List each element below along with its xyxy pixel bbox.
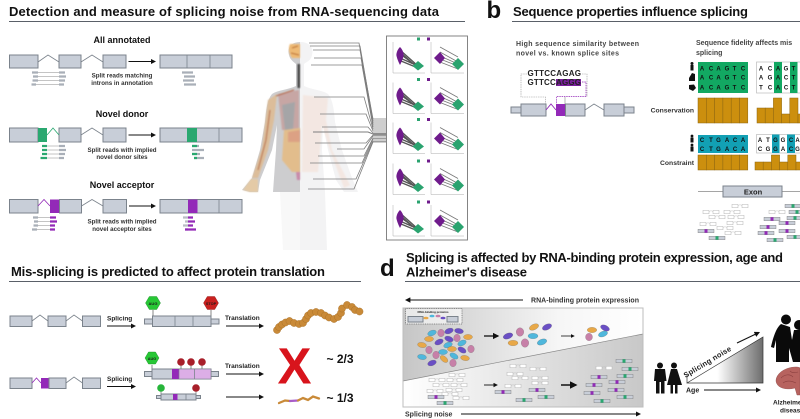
chart: splicing noise wedge bbox=[687, 337, 763, 383]
arrow: bottom two bbox=[561, 384, 576, 386]
isoforms: high splicing noise bbox=[584, 359, 638, 403]
icon: human body anatomy bbox=[242, 42, 358, 250]
diagram: all annotated gene bbox=[10, 55, 232, 84]
diagram: short mRNA bbox=[156, 384, 200, 400]
alignment: variable green: C bbox=[784, 86, 789, 92]
diagram: normal mRNA with AUG and STOP: AUG bbox=[149, 301, 157, 306]
label: splicing noise rotated: Splicing noise bbox=[682, 344, 733, 380]
alignment: variable green: G bbox=[768, 76, 773, 82]
arrow: bottom one bbox=[484, 384, 497, 386]
isoforms: medium splicing noise bbox=[495, 364, 554, 402]
alignment: variable blue: G bbox=[766, 147, 771, 153]
arrow: splicing mis-spliced: Splicing bbox=[107, 376, 132, 383]
alignment: variable green: C bbox=[784, 76, 789, 82]
arrow: splicing mis-spliced bbox=[107, 376, 135, 386]
text: high sequence similarity: High sequence similarity between bbox=[516, 41, 639, 48]
alignment: variable blue: C bbox=[758, 147, 763, 153]
cluster: proteins high bbox=[417, 327, 474, 367]
title: mis-splicing: Mis-splicing is predicted to affect protein translation bbox=[11, 264, 325, 279]
arrow: age bbox=[704, 389, 760, 391]
panel: RBP expression, age and Alzheimer's bbox=[380, 250, 800, 418]
alignment: constrained blue: G bbox=[716, 138, 721, 144]
label: RBP expression: RNA-binding protein expression bbox=[531, 298, 639, 304]
alignment: variable blue: C bbox=[789, 138, 794, 144]
alignment: variable blue bbox=[756, 134, 800, 153]
label: constraint: Constraint bbox=[660, 160, 695, 167]
arrow: translation to decay: Translation bbox=[225, 363, 260, 370]
alignment: conserved green: G bbox=[725, 66, 730, 72]
caption: all annotated: Split reads matching bbox=[92, 72, 153, 80]
alignment: constrained blue: G bbox=[716, 147, 721, 153]
panel: noise gradient box bbox=[403, 308, 643, 407]
alignment: constrained blue: A bbox=[725, 147, 730, 153]
title: splicing affected line two: Alzheimer's disease bbox=[406, 264, 527, 280]
alignment: constrained blue: T bbox=[709, 138, 713, 144]
alignment: variable green: A bbox=[776, 86, 781, 92]
diagram: splice site similarity: GTTCCAGAG bbox=[528, 69, 581, 78]
label: conservation: Conservation bbox=[651, 108, 694, 114]
alignment: variable blue: G bbox=[773, 138, 778, 144]
arrow: RBP expression bbox=[406, 299, 523, 301]
title: sequence properties: Sequence properties influence splicing bbox=[513, 4, 748, 19]
heading: novel donor: Novel donor bbox=[96, 109, 149, 119]
value: two thirds: ~ 2/3 bbox=[326, 352, 354, 366]
diagram: normal mRNA with AUG and STOP: STOP bbox=[206, 302, 217, 306]
arrow: short translation bbox=[226, 396, 263, 398]
arrow: top one bbox=[484, 335, 498, 337]
alignment: variable green: T bbox=[792, 66, 796, 72]
alignment: variable green: A bbox=[759, 66, 764, 72]
alignment: conserved green: G bbox=[725, 76, 730, 82]
text: novel vs known: novel vs. known splice sites bbox=[516, 50, 619, 58]
alignment: variable green: T bbox=[759, 86, 763, 92]
icon: truncated protein bbox=[279, 396, 319, 403]
label: splicing noise: Splicing noise bbox=[405, 412, 453, 418]
alignment: variable blue: A bbox=[795, 138, 800, 144]
label: age: Age bbox=[686, 388, 699, 394]
alignment: variable blue: C bbox=[789, 147, 794, 153]
diagram: mRNA with premature stops bbox=[144, 352, 218, 379]
diagram: novel donor gene bbox=[10, 128, 242, 158]
diagram: normal pre-mRNA bbox=[10, 315, 100, 326]
cluster: proteins low bbox=[586, 324, 610, 341]
panel: sequence properties bbox=[486, 0, 800, 242]
heading: all annotated: All annotated bbox=[93, 35, 151, 45]
arrow: translation to decay bbox=[225, 363, 263, 374]
alignment: variable green: C bbox=[768, 66, 773, 72]
alignment: conserved green: A bbox=[716, 86, 721, 92]
diagram: splice site similarity: GTTCCAGGG bbox=[528, 78, 581, 87]
isoforms: low noise exon bbox=[698, 204, 748, 240]
text: sequence fidelity: Sequence fidelity affects mis bbox=[696, 40, 792, 47]
diagram: exon: Exon bbox=[744, 188, 763, 197]
diagram: mRNA with premature stops: AUG bbox=[148, 357, 156, 361]
alignment: constrained blue: C bbox=[733, 147, 738, 153]
icon: red X: X bbox=[278, 338, 312, 394]
alignment: conserved green: A bbox=[700, 66, 705, 72]
alignment: variable green bbox=[756, 62, 800, 93]
diagram: normal mRNA with AUG and STOP bbox=[144, 296, 219, 326]
alignment: conserved green: A bbox=[716, 66, 721, 72]
alignment: constrained blue bbox=[698, 135, 748, 153]
lines: tissue connector bundle bbox=[308, 43, 386, 189]
alignment: constrained blue: T bbox=[709, 147, 713, 153]
alignment: variable blue: A bbox=[758, 138, 763, 144]
alignment: conserved green: A bbox=[700, 76, 705, 82]
alignment: constrained blue: A bbox=[741, 147, 746, 153]
arrow: top two bbox=[561, 335, 574, 337]
panel: tissue violin plots bbox=[386, 36, 468, 240]
panel: detection of splicing noise bbox=[9, 4, 468, 250]
arrow: splicing normal bbox=[107, 316, 135, 326]
arrow: translation normal: Translation bbox=[225, 315, 260, 322]
arrow: splicing noise bbox=[461, 413, 640, 415]
title: detection heading: Detection and measure of splicing noise from RNA-sequencing data bbox=[9, 4, 440, 19]
alignment: conserved green: A bbox=[716, 76, 721, 82]
alignment: constrained blue: A bbox=[725, 138, 730, 144]
alignment: conserved green: C bbox=[709, 86, 714, 92]
alignment: conserved green: G bbox=[725, 86, 730, 92]
icons: species silhouettes bbox=[689, 62, 696, 152]
alignment: conserved green: C bbox=[741, 86, 746, 92]
panel letter d: d bbox=[380, 255, 395, 282]
diagram: mis-spliced pre-mRNA bbox=[10, 377, 100, 388]
alignment: conserved green: T bbox=[733, 66, 737, 72]
alignment: variable blue: G bbox=[773, 147, 778, 153]
panel: protein translation bbox=[9, 264, 363, 405]
alignment: variable green: C bbox=[768, 86, 773, 92]
alignment: conserved green: A bbox=[700, 86, 705, 92]
arrow: splicing normal: Splicing bbox=[107, 316, 132, 322]
inset: RNA-binding proteins bbox=[406, 308, 462, 324]
isoforms: high noise exon bbox=[758, 204, 800, 242]
arrow: translation normal bbox=[225, 315, 263, 326]
alignment: conserved green: T bbox=[733, 86, 737, 92]
alignment: variable blue: A bbox=[781, 147, 786, 153]
bar chart: conservation bbox=[698, 98, 800, 123]
alignment: conserved green: C bbox=[709, 76, 714, 82]
alignment: constrained blue: C bbox=[700, 138, 705, 144]
alignment: conserved green: C bbox=[741, 66, 746, 72]
icon: young couple bbox=[654, 362, 682, 394]
bar chart: constraint bbox=[698, 155, 800, 170]
cluster: proteins medium bbox=[502, 322, 553, 347]
text: splicing: splicing bbox=[696, 50, 722, 57]
icon: elderly couple bbox=[771, 314, 800, 362]
caption: novel donor: Split reads with implied bbox=[87, 147, 157, 154]
alignment: variable blue: G bbox=[781, 138, 786, 144]
title: splicing affected line one: Splicing is affected by RNA-binding protein expression, age and bbox=[406, 250, 783, 265]
alignment: variable green: A bbox=[759, 76, 764, 82]
alignment: constrained blue: C bbox=[733, 138, 738, 144]
alignment: conserved green: C bbox=[709, 66, 714, 72]
alignment: variable green: A bbox=[776, 76, 781, 82]
alignment: constrained blue: C bbox=[700, 147, 705, 153]
diagram: splice site similarity bbox=[511, 69, 634, 116]
icon: full-length protein chain bbox=[273, 301, 363, 334]
alignment: variable green: G bbox=[784, 66, 789, 72]
alignment: conserved green bbox=[698, 62, 748, 93]
heading: novel acceptor: Novel acceptor bbox=[90, 180, 155, 190]
value: one third: ~ 1/3 bbox=[326, 391, 354, 405]
alignment: variable green: T bbox=[792, 86, 796, 92]
isoforms: low splicing noise bbox=[427, 373, 469, 405]
diagram: novel acceptor gene bbox=[10, 200, 242, 230]
alignment: variable green: T bbox=[792, 76, 796, 82]
icon: brain bbox=[776, 367, 800, 395]
alignment: variable blue: G bbox=[795, 147, 800, 153]
caption: novel donor line two: novel donor sites bbox=[96, 154, 148, 161]
diagram: exon bbox=[698, 186, 800, 197]
alignment: variable blue: T bbox=[766, 138, 770, 144]
arrow: noise rising bbox=[737, 332, 759, 343]
alignment: variable green: A bbox=[776, 66, 781, 72]
alignment: conserved green: T bbox=[733, 76, 737, 82]
alignment: constrained blue: A bbox=[741, 138, 746, 144]
alignment: conserved green: C bbox=[741, 76, 746, 82]
caption: novel acceptor: Split reads with implied bbox=[87, 218, 157, 226]
caption: all annotated line two: introns in annotation bbox=[91, 80, 153, 87]
inset: RNA-binding proteins: RNA-binding proteins bbox=[418, 310, 449, 314]
caption: novel acceptor line two: novel acceptor sites bbox=[92, 226, 152, 233]
